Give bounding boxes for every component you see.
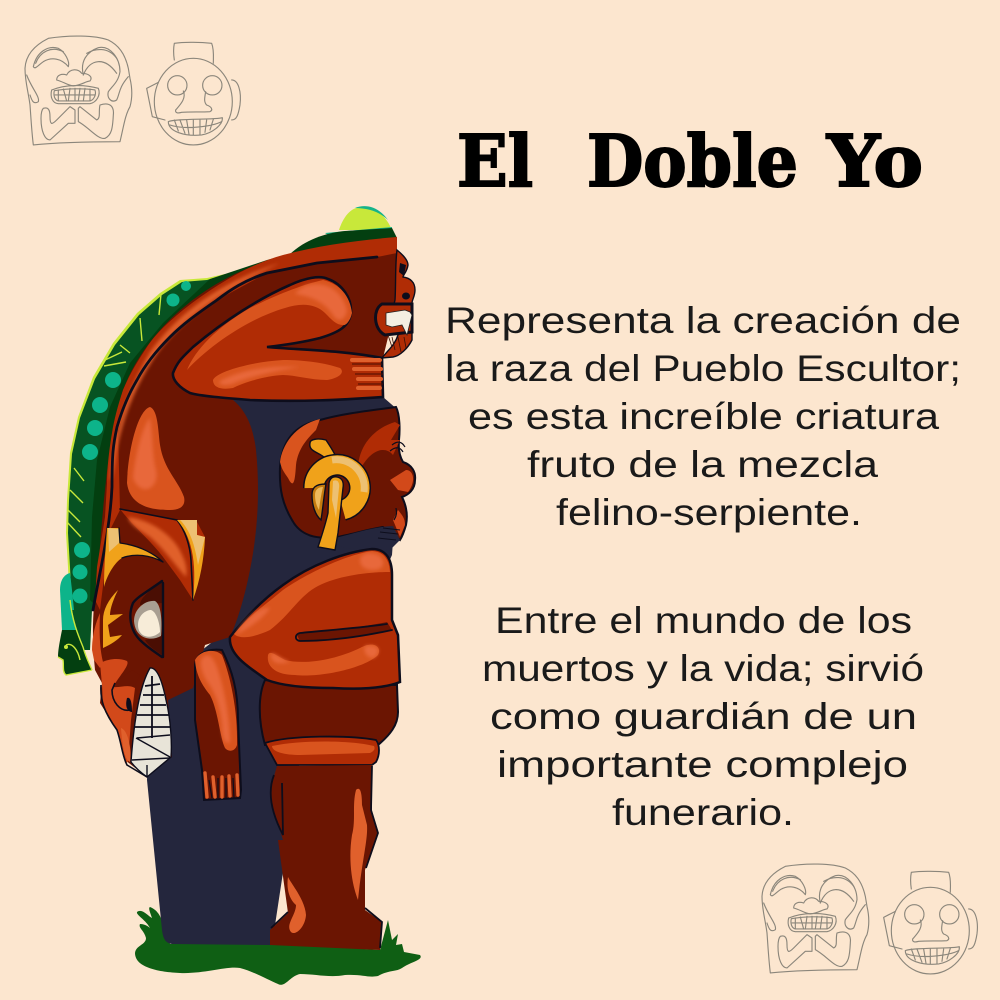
icon: bottom-right round mask glyph	[884, 871, 977, 974]
illustration: El Doble Yo statue	[58, 206, 421, 985]
cape teal dots	[72, 281, 191, 604]
title: Doble	[587, 119, 798, 203]
title: Yo	[826, 119, 923, 203]
icon: top-left round mask glyph	[147, 42, 240, 145]
grass	[135, 907, 421, 985]
text block: creation description: felino-serpiente.	[556, 492, 862, 533]
cape green	[68, 255, 285, 610]
text block: creation description: Representa la creación de	[445, 300, 961, 341]
ear stripe	[92, 613, 103, 668]
fang tooth	[131, 668, 171, 777]
navy pillar	[147, 397, 400, 945]
text block: guardian description: Entre el mundo de los	[495, 600, 912, 641]
hanging arm and hand	[195, 650, 241, 800]
title: El	[457, 119, 533, 203]
shoulder highlight	[127, 407, 184, 510]
text block: creation description: la raza del Pueblo Escultor;	[445, 348, 961, 389]
title	[457, 119, 923, 203]
gold knot	[310, 439, 364, 550]
icon: bottom-right carved mask glyph	[762, 864, 869, 973]
lower head eye	[130, 581, 163, 657]
text block: guardian description: funerario.	[612, 792, 794, 833]
upper figure torso	[173, 277, 383, 401]
orange crest band	[95, 237, 397, 610]
icon: top-left carved mask glyph	[25, 36, 132, 145]
lower figure belly	[260, 680, 398, 745]
cape dark inner band	[90, 254, 290, 610]
text block: guardian description: muertos y la vida; sirvió	[482, 648, 924, 689]
text block: guardian description: importante complejo	[497, 744, 908, 785]
middle figure	[280, 407, 415, 550]
headdress cap lime	[339, 207, 392, 230]
teal side block and small green face	[58, 573, 92, 675]
text block: guardian description: como guardián de un	[490, 696, 917, 737]
headdress dark green	[290, 228, 397, 254]
statue body maroon	[93, 240, 397, 777]
crest black contour	[93, 257, 377, 610]
cape outer lime outline	[66, 274, 225, 610]
text block: creation description: fruto de la mezcla	[527, 444, 879, 485]
text block: guardian description	[482, 600, 924, 833]
text block: creation description: es esta increíble criatura	[468, 396, 939, 437]
lower leg	[270, 765, 382, 950]
cape veins	[67, 294, 161, 537]
leg band	[265, 737, 379, 765]
text block: creation description	[445, 300, 961, 533]
upper face	[376, 250, 415, 358]
lower head nose detail	[101, 683, 147, 777]
gold brow ornaments	[103, 509, 205, 648]
upper mouth with teeth	[376, 304, 412, 335]
upper hand fingers	[352, 360, 381, 388]
nose of lower head	[100, 659, 135, 763]
crest highlight	[110, 263, 280, 480]
lower figure thigh	[230, 549, 400, 689]
